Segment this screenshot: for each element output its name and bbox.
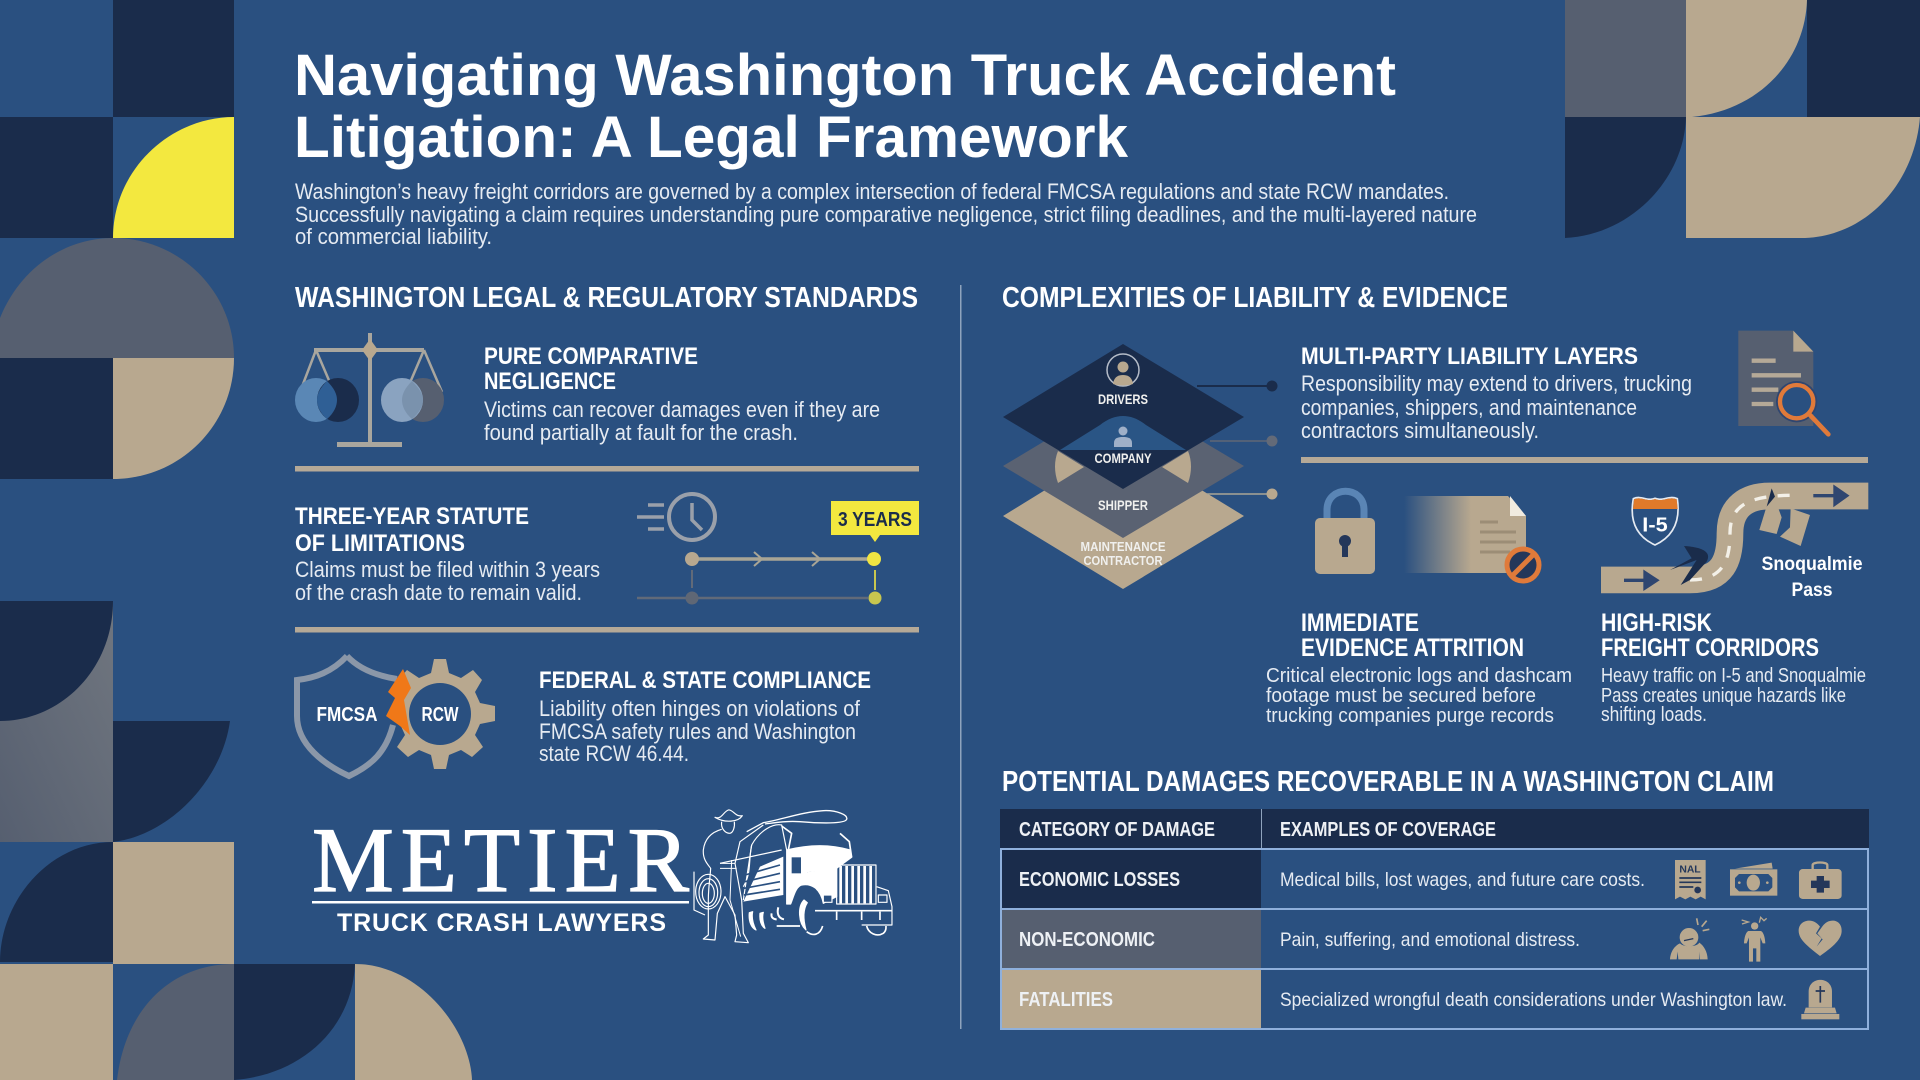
layer: maintenance contractor [1003, 442, 1244, 589]
table: damages [1000, 809, 1869, 1029]
diagram: liability layers: COMPANY [1094, 450, 1152, 466]
diagram: liability layers: SHIPPER [1098, 497, 1148, 513]
icon: scales of justice [295, 333, 444, 447]
block: high-risk freight corridors: HIGH-RISK [1601, 609, 1712, 637]
layer: shipper [1003, 394, 1244, 538]
logo: Metier Truck Crash Lawyers [312, 809, 892, 943]
block: multi-party liability: Responsibility may extend to drivers, trucking [1301, 371, 1692, 396]
icon: driver [1107, 354, 1139, 386]
table header: CATEGORY OF DAMAGE [1019, 819, 1215, 841]
row: fatalities [1001, 970, 1787, 1028]
callout: 3 years [831, 501, 919, 542]
block: three-year statute: Claims must be filed within 3 years [295, 557, 600, 582]
icon: padlock [1315, 491, 1375, 574]
block: federal and state compliance: FMCSA safety rules and Washington [539, 719, 856, 744]
icon: FMCSA shield and RCW gear [297, 656, 495, 776]
block: immediate evidence attrition: trucking companies purge records [1266, 705, 1554, 727]
decorative tiles: top left [0, 0, 234, 479]
label: Snoqualmie Pass [1762, 554, 1862, 601]
block: immediate evidence attrition: footage must be secured before [1266, 685, 1536, 707]
row: economic losses: ECONOMIC LOSSES [1019, 869, 1180, 891]
heading: legal standards: WASHINGTON LEGAL & REGULATORY STANDARDS [295, 282, 918, 314]
row: economic losses [1001, 850, 1645, 909]
heading: potential damages: POTENTIAL DAMAGES RECOVERABLE IN A WASHINGTON CLAIM [1002, 766, 1774, 798]
row: non-economic [1001, 910, 1580, 969]
icon: I-5 shield: I-5 [1642, 514, 1668, 536]
block: federal and state compliance: Liability often hinges on violations of [539, 696, 861, 721]
icon: company person [1114, 426, 1132, 447]
block: immediate evidence attrition: IMMEDIATE [1301, 609, 1419, 637]
title [294, 43, 1396, 170]
connectors [1197, 380, 1278, 500]
block: immediate evidence attrition: EVIDENCE ATTRITION [1301, 634, 1524, 662]
block: federal and state compliance: FEDERAL & STATE COMPLIANCE [539, 667, 871, 694]
block: high-risk freight corridors: FREIGHT CORRIDORS [1601, 634, 1819, 662]
decorative tiles: top right [1565, 0, 1920, 238]
block: multi-party liability: contractors simultaneously. [1301, 418, 1539, 443]
row: fatalities: FATALITIES [1019, 989, 1113, 1011]
block: immediate evidence attrition: Critical electronic logs and dashcam [1266, 665, 1572, 687]
icon: fading document [1404, 496, 1539, 581]
block: immediate evidence attrition [1266, 609, 1572, 727]
icon: prohibited sign [1507, 549, 1539, 581]
block: pure comparative negligence: NEGLIGENCE [484, 368, 616, 395]
diagram: liability layers: CONTRACTOR [1084, 553, 1163, 568]
row: fatalities: Specialized wrongful death considerations under Washington law. [1280, 989, 1787, 1011]
layer: company lens [1060, 416, 1186, 450]
block: three-year statute [295, 503, 600, 605]
row: non-economic: NON-ECONOMIC [1019, 929, 1155, 951]
diagram: liability layers: DRIVERS [1098, 391, 1148, 407]
block: high-risk freight corridors: shifting loads. [1601, 704, 1707, 726]
layer: tan ring pieces [1055, 451, 1191, 483]
block: pure comparative negligence [484, 343, 880, 445]
title: Litigation: A Legal Framework [294, 105, 1129, 170]
block: high-risk freight corridors: Heavy traffic on I-5 and Snoqualmie [1601, 665, 1866, 687]
block: multi-party liability: MULTI-PARTY LIABILITY LAYERS [1301, 343, 1638, 370]
block: pure comparative negligence: PURE COMPARATIVE [484, 343, 698, 370]
icons in table [1670, 860, 1842, 1019]
icon: FMCSA shield and RCW gear: FMCSA [316, 704, 378, 726]
block: three-year statute: THREE-YEAR STATUTE [295, 503, 529, 530]
label: Snoqualmie Pass: Snoqualmie [1762, 554, 1862, 575]
icon: anxious figure [1742, 917, 1767, 962]
diagram: liability layers: MAINTENANCE [1080, 539, 1166, 554]
block: pure comparative negligence: found partially at fault for the crash. [484, 420, 798, 445]
icon: clock [637, 494, 715, 540]
diagram: liability layers [1003, 344, 1278, 589]
block: federal and state compliance: state RCW 46.44. [539, 741, 689, 766]
column divider [960, 285, 962, 1029]
icon: document with magnifier [1738, 331, 1828, 434]
title: Navigating Washington Truck Accident [294, 43, 1396, 108]
block: high-risk freight corridors [1601, 609, 1866, 726]
block: three-year statute: OF LIMITATIONS [295, 530, 465, 557]
layer: drivers [1003, 344, 1244, 489]
intro paragraph: Washington’s heavy freight corridors are governed by a complex intersection of federal FMCSA regulations and state RCW mandates. [295, 179, 1449, 204]
icon: medical kit [1799, 862, 1842, 899]
icon: bill: NAL [1679, 865, 1701, 876]
icon: road with I-5 shield [1601, 488, 1868, 588]
intro paragraph: Successfully navigating a claim requires understanding pure comparative negligence, strict filing deadlines, and the multi-layered nature [295, 202, 1477, 227]
heading: complexities: COMPLEXITIES OF LIABILITY & EVIDENCE [1002, 282, 1508, 314]
icon: I-5 shield [1632, 498, 1678, 545]
block: multi-party liability: companies, shippers, and maintenance [1301, 395, 1637, 420]
block: pure comparative negligence: Victims can recover damages even if they are [484, 397, 880, 422]
table header: EXAMPLES OF COVERAGE [1280, 819, 1496, 841]
icon: cash [1730, 863, 1777, 896]
row: economic losses: Medical bills, lost wages, and future care costs. [1280, 869, 1645, 891]
block: high-risk freight corridors: Pass creates unique hazards like [1601, 685, 1846, 707]
block: three-year statute: of the crash date to remain valid. [295, 580, 582, 605]
icon: bill [1675, 860, 1706, 899]
block: federal and state compliance [539, 667, 871, 766]
callout: 3 years: 3 YEARS [838, 509, 912, 531]
icon: cowboy and truck [694, 810, 892, 943]
decorative tiles: bottom left [0, 601, 472, 1080]
label: Snoqualmie Pass: Pass [1792, 580, 1832, 601]
intro paragraph [295, 179, 1477, 249]
logo: Metier Truck Crash Lawyers: TRUCK CRASH LAWYERS [337, 909, 666, 937]
table header [1000, 809, 1869, 849]
icon: tombstone [1801, 980, 1839, 1019]
icon: broken heart [1799, 921, 1842, 956]
row: non-economic: Pain, suffering, and emotional distress. [1280, 929, 1580, 951]
icon: distressed person [1670, 918, 1709, 959]
block: multi-party liability [1301, 343, 1692, 443]
intro paragraph: of commercial liability. [295, 224, 492, 249]
timeline [637, 552, 882, 604]
logo: Metier Truck Crash Lawyers: METIER [312, 809, 690, 911]
icon: FMCSA shield and RCW gear: RCW [422, 704, 459, 726]
